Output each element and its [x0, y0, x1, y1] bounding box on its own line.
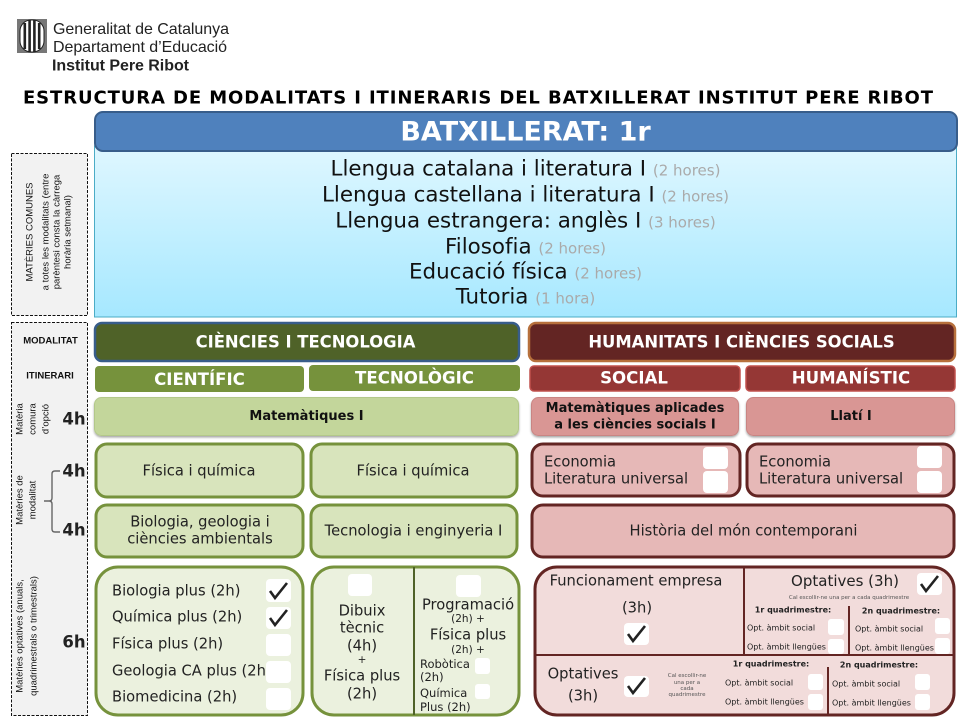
panel: optatives tecnològic — [312, 567, 519, 715]
panel: side label common subjects: MATÈRIES COMUNES — [24, 182, 36, 282]
subject: Economia / Literatura social: Economia — [544, 454, 616, 470]
subject list: Educació física — [409, 260, 568, 284]
panel: side labels structure: 6h — [62, 632, 86, 652]
panel: optatives tecnològic: (4h) — [347, 638, 377, 654]
panel: optatives científic: Química plus (2h) — [112, 608, 242, 626]
block: Optatives upper: Opt. àmbit llengües — [747, 642, 826, 652]
subject list: (2 hores) — [538, 240, 606, 258]
subject: Biologia, geologia: ciències ambientals — [127, 530, 273, 548]
block: Optatives lower: Opt. àmbit llengües — [832, 698, 911, 708]
panel: optatives tecnològic: tècnic — [340, 620, 384, 636]
panel: Ciències i Tecnologia header: CIÈNCIES I TECNOLOGIA — [196, 332, 416, 352]
block: Optatives lower: Opt. àmbit llengües — [725, 698, 804, 706]
panel: optatives tecnològic: (2h) + — [451, 613, 485, 625]
panel: optatives tecnològic: Química — [420, 686, 467, 700]
icon: checked box — [624, 623, 649, 645]
subject: Biologia, geologia — [96, 505, 303, 557]
panel: side label common subjects: horària setmanal) — [62, 195, 74, 269]
panel: optatives tecnològic: (2h) — [420, 670, 444, 684]
panel: side labels structure: 4h — [62, 462, 86, 480]
panel: optatives tecnològic: + — [358, 654, 366, 666]
panel: optatives científic: Biomedicina (2h) — [112, 688, 237, 706]
subject: Matemàtiques aplicades — [532, 398, 738, 436]
icon: bracket — [44, 471, 60, 532]
itinerary: Científic: CIENTÍFIC — [154, 370, 245, 389]
panel: common subjects — [94, 112, 957, 317]
subject: Llatí I: Llatí I — [830, 409, 872, 424]
block: Optatives upper: Cal escollir-ne una per a cada quadrimestre — [789, 595, 910, 601]
panel: side labels structure: 4h — [62, 520, 86, 540]
subject: Matemàtiques I — [94, 398, 518, 436]
subject list: Llengua estrangera: anglès I — [335, 208, 641, 234]
logo: Generalitat de Catalunya — [17, 19, 229, 74]
logo text: Departament d’Educació — [53, 39, 227, 56]
panel: optatives científic: Física plus (2h) — [112, 636, 223, 652]
block: Optatives upper: Optatives (3h) — [791, 572, 899, 590]
panel: side label common subjects — [12, 154, 88, 316]
subject: Matemàtiques aplicades: a les ciències socials I — [554, 418, 716, 432]
panel: optatives tecnològic: Plus (2h) — [420, 700, 471, 714]
block: Optatives lower — [548, 660, 930, 710]
panel: side labels structure: ITINERARI — [26, 370, 74, 382]
panel: optatives tecnològic: Física plus — [324, 668, 400, 684]
block: Optatives upper: Opt. àmbit llengües — [855, 644, 934, 652]
subject list: (1 hora) — [535, 290, 595, 308]
block: Optatives lower: 2n quadrimestre: — [840, 660, 918, 670]
subject: Física i química (científic): Física i química — [143, 462, 255, 480]
panel: optatives científic: Biologia plus (2h) — [112, 582, 240, 600]
icon: checked box — [624, 676, 649, 697]
panel: Ciències i Tecnologia header — [95, 323, 519, 361]
subject: Economia / Literatura humanístic — [747, 444, 954, 496]
panel: side label common subjects: parèntesi consta la càrrega — [52, 174, 62, 289]
panel: side labels structure: modalitat — [28, 480, 38, 519]
logo text: Generalitat de Catalunya — [53, 21, 229, 38]
subject list: Tutoria — [456, 284, 528, 310]
subject: Història del món contemporani — [532, 505, 954, 557]
panel: side labels structure: d’opció — [40, 404, 52, 434]
logo text: Institut Pere Ribot — [52, 58, 190, 74]
subject list: (2 hores) — [574, 264, 642, 282]
panel: optatives tecnològic: Programació — [422, 596, 514, 614]
panel: side labels structure: 4h — [62, 410, 86, 428]
block: Optatives lower: quadrimestre — [669, 692, 706, 698]
subject: Biologia, geologia: Biologia, geologia i — [130, 514, 270, 530]
text: Funcionament empresa — [550, 572, 722, 616]
icon: checked box — [266, 607, 291, 629]
panel: optatives científic — [96, 567, 303, 715]
block: Optatives lower: cada — [680, 686, 694, 692]
itinerary: Tecnològic: TECNOLÒGIC — [355, 368, 474, 388]
panel: Humanitats header: HUMANITATS I CIÈNCIES SOCIALS — [588, 332, 895, 352]
panel: side labels structure: MODALITAT — [23, 336, 78, 346]
block: Optatives lower: una per a — [674, 680, 700, 686]
panel: optatives tecnològic: (2h) — [347, 686, 377, 702]
block: Optatives lower: 1r quadrimestre: — [733, 660, 809, 668]
panel: side labels structure: quadrimestrals o trimestrals) — [28, 576, 40, 696]
panel: optatives tecnològic: Dibuix — [339, 602, 386, 620]
subject list: Filosofia — [445, 234, 532, 260]
block: Optatives lower: (3h) — [568, 688, 598, 704]
block: Optatives lower: Opt. àmbit social — [832, 680, 900, 688]
subject: Matemàtiques aplicades: Matemàtiques aplicades — [546, 401, 725, 416]
panel: side labels structure: Matèries optatives (anuals, — [14, 579, 26, 693]
panel: side labels structure: Matèries de — [14, 475, 26, 525]
subject: Llatí I — [746, 398, 954, 436]
itinerary: Social — [530, 366, 740, 391]
panel: optatives tecnològic: Física plus — [430, 626, 506, 644]
panel: optatives científic: Geologia CA plus (2h — [112, 662, 266, 680]
subject list: (3 hores) — [648, 214, 716, 232]
panel: optatives tecnològic: Robòtica — [420, 657, 470, 671]
subject: Economia / Literatura humanístic: Economia — [759, 454, 831, 470]
block: Optatives lower: Cal escollir-ne — [668, 673, 707, 679]
itinerary: Social: SOCIAL — [600, 368, 668, 388]
panel: side labels structure — [12, 322, 88, 716]
subject: Economia / Literatura social — [532, 444, 740, 496]
itinerary: Científic — [95, 366, 304, 392]
itinerary: Humanístic: HUMANÍSTIC — [792, 368, 910, 388]
heading: BATXILLERAT 1r — [95, 112, 957, 151]
icon: checked box — [917, 573, 942, 595]
itinerary: Humanístic — [746, 366, 955, 391]
panel: side labels structure: Matèria — [14, 402, 26, 435]
block: Optatives upper — [747, 572, 950, 654]
subject: Física i química (tecnològic): Física i química — [357, 462, 469, 480]
block: Optatives upper: 1r quadrimestre: — [755, 606, 831, 614]
block: Optatives upper: Opt. àmbit social — [855, 624, 923, 634]
subject: Economia / Literatura humanístic: Literatura universal — [759, 470, 903, 488]
subject: Economia / Literatura social: Literatura universal — [544, 470, 688, 488]
icon: coat of arms — [17, 19, 47, 53]
subject: Matemàtiques I: Matemàtiques I — [249, 409, 364, 424]
block: Optatives upper: Opt. àmbit social — [747, 624, 815, 632]
text: Funcionament empresa: (3h) — [622, 600, 652, 616]
subject list: Llengua catalana i literatura I — [331, 156, 646, 182]
block: Optatives lower: Optatives — [548, 666, 618, 682]
block: Optatives lower: Opt. àmbit social — [725, 678, 793, 688]
text: Funcionament empresa: Funcionament empresa — [550, 572, 722, 590]
subject: Tecnologia i enginyeria — [311, 505, 517, 557]
panel: side label common subjects: a totes les modalitats (entre — [40, 174, 52, 290]
logo text — [52, 21, 229, 74]
itinerary: Tecnològic — [309, 365, 520, 391]
panel: Humanitats header — [529, 323, 955, 361]
subject list: (2 hores) — [661, 188, 729, 206]
subject list: (2 hores) — [653, 162, 720, 180]
heading: BATXILLERAT 1r: BATXILLERAT: 1r — [400, 116, 651, 148]
block: Optatives upper: 2n quadrimestre: — [862, 606, 940, 616]
subject: Física i química (tecnològic) — [311, 444, 517, 497]
panel: optatives tecnològic: (2h) + — [451, 644, 485, 656]
subject: Tecnologia i enginyeria: Tecnologia i enginyeria I — [324, 522, 502, 540]
panel: optatives social i humanístic — [535, 567, 954, 715]
title: ESTRUCTURA DE MODALITATS I ITINERARIS DEL BATXILLERAT INSTITUT PERE RIBOT — [23, 88, 934, 108]
panel: side labels structure: comura — [28, 402, 38, 435]
subject list: Llengua castellana i literatura I — [322, 182, 655, 208]
subject list — [322, 156, 729, 310]
subject: Història del món contemporani: Història del món contemporani — [630, 522, 857, 540]
subject: Física i química (científic) — [96, 444, 303, 497]
icon: checked box — [266, 579, 291, 602]
